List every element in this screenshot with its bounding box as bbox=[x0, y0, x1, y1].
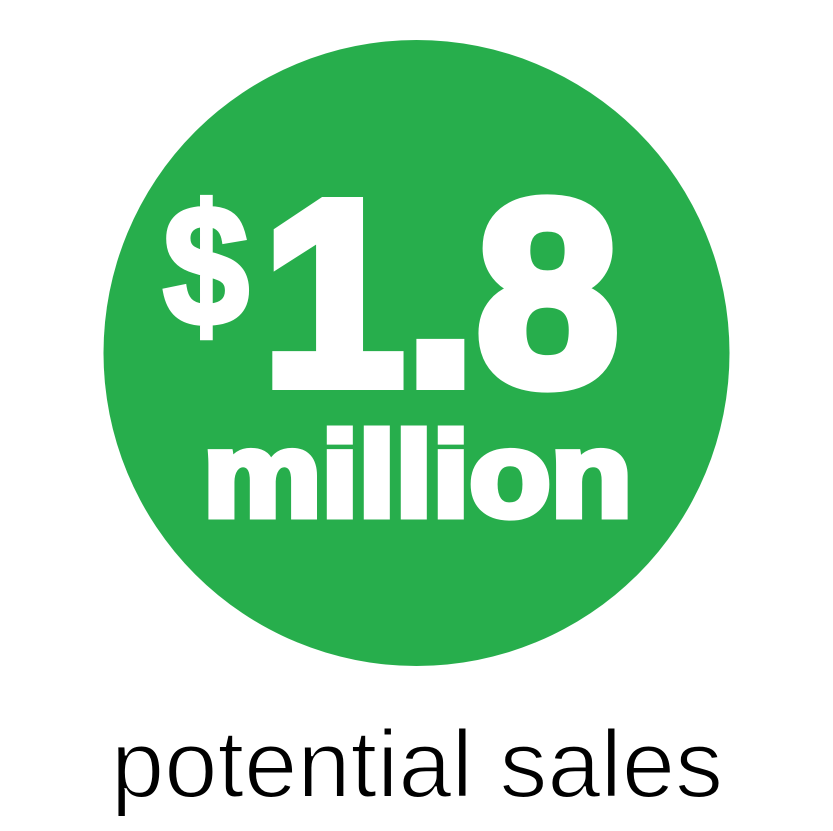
amount: 1.8: 1.8 bbox=[262, 146, 619, 440]
caption: potential sales: potential sales bbox=[111, 711, 723, 818]
green circle bbox=[104, 40, 730, 666]
dollar sign: $ bbox=[163, 170, 249, 362]
word: million: million bbox=[203, 408, 632, 542]
